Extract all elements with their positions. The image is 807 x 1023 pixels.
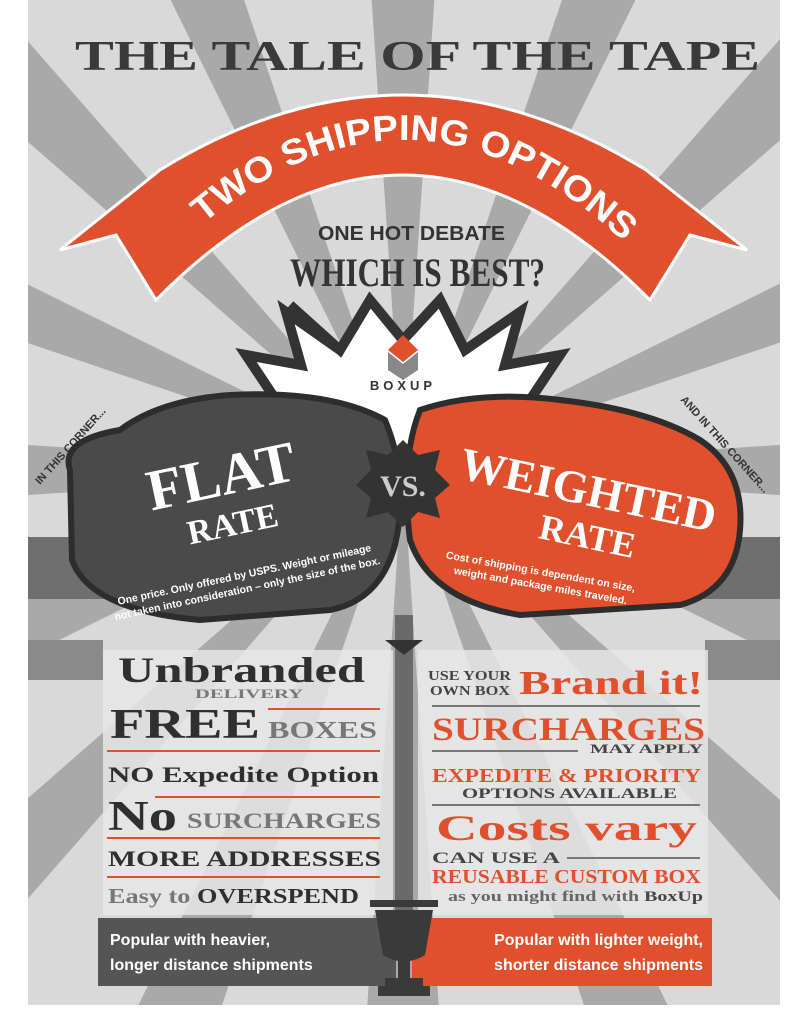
glove: weighted rate: WEIGHTED (455, 438, 721, 542)
footer: flat rate popular: Popular with heavier, (110, 932, 270, 949)
footer: flat rate popular: longer distance shipments (110, 957, 313, 974)
corner labels: IN THIS CORNER... (33, 405, 108, 487)
title: THE TALE OF THE TAPE (75, 34, 760, 80)
glove: weighted rate (407, 397, 740, 615)
panel: flat rate list: BOXES (268, 718, 377, 744)
panel: flat rate list: MORE ADDRESSES (108, 846, 381, 871)
footer: weighted popular (412, 918, 712, 986)
glove: flat rate: not taken into consideration – only the size of the box. (113, 555, 381, 623)
glove: weighted rate: RATE (536, 507, 639, 566)
panel: weighted rate list: as you might find with BoxUp (448, 889, 703, 905)
starburst with logo (206, 300, 600, 470)
banner: two shipping options (59, 94, 748, 302)
text: AND IN THIS CORNER... (678, 394, 771, 496)
glove: weighted rate: Cost of shipping is dependent on size, (445, 549, 636, 595)
panel: flat rate list: Easy to OVERSPEND (108, 884, 359, 908)
panel: weighted rate list: EXPEDITE & PRIORITY (432, 765, 702, 787)
panel: flat rate list: SURCHARGES (187, 808, 381, 833)
panel: flat rate list: Unbranded (118, 650, 365, 690)
subtitle: WHICH IS BEST? (290, 250, 545, 295)
panel: weighted rate list: MAY APPLY (590, 741, 704, 756)
panel: weighted rate list: Costs vary (436, 808, 697, 848)
glove: flat rate (69, 394, 401, 623)
panel: weighted rate list: USE YOUR (428, 669, 512, 684)
panel: flat rate list (103, 650, 393, 915)
panel: flat rate list: FREE (110, 702, 260, 748)
footer: flat rate popular (98, 918, 396, 986)
glove: flat rate: FLAT (141, 429, 301, 523)
panel: weighted rate list (418, 650, 708, 915)
footer: weighted popular: Popular with lighter weight, (494, 932, 703, 949)
panel: weighted rate list: CAN USE A (432, 850, 561, 867)
glove: flat rate: RATE (184, 497, 282, 552)
banner: two shipping options: TWO SHIPPING OPTIONS (188, 115, 636, 238)
panel: flat rate list: NO Expedite Option (108, 762, 379, 787)
panel: weighted rate list: OWN BOX (430, 684, 510, 699)
starburst with logo: BOXUP (370, 378, 436, 393)
vs badge: VS. (380, 470, 426, 503)
footer: weighted popular: shorter distance shipments (494, 957, 703, 974)
panel: weighted rate list: Brand it! (519, 665, 703, 702)
icon: trophy (370, 900, 438, 996)
center post (385, 615, 423, 915)
ring ropes (28, 537, 780, 680)
panel: weighted rate list: SURCHARGES (432, 712, 705, 748)
panel: flat rate list: No (108, 794, 177, 840)
panel: weighted rate list: REUSABLE CUSTOM BOX (432, 866, 702, 888)
subtitle (290, 223, 545, 295)
vs badge (356, 440, 450, 527)
panel: flat rate list: DELIVERY (195, 686, 304, 701)
panel: weighted rate list: OPTIONS AVAILABLE (462, 786, 677, 802)
subtitle: ONE HOT DEBATE (318, 223, 505, 245)
glove: weighted rate: weight and package miles traveled. (452, 565, 628, 607)
glove: flat rate: One price. Only offered by USPS. Weight or mileage (117, 542, 372, 608)
